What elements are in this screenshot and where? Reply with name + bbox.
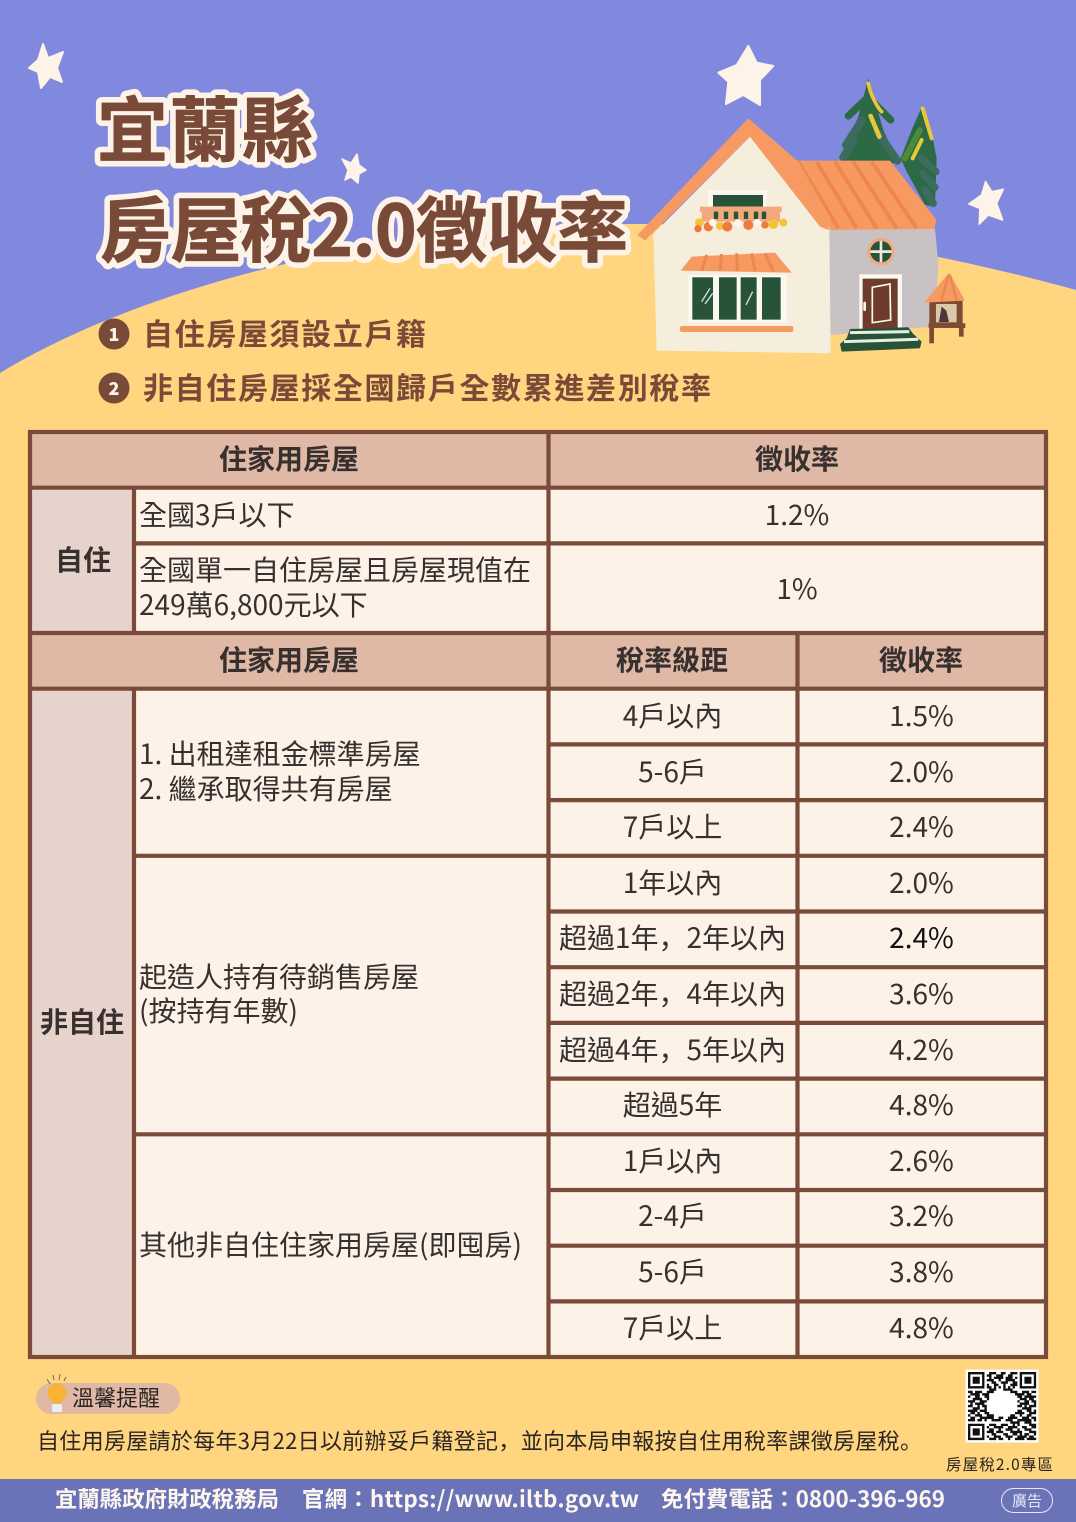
non-owner-occupied label cell — [30, 689, 134, 1357]
rates column: 3.6% — [889, 973, 954, 1013]
brackets column: 2-4戶 — [638, 1195, 707, 1235]
title line 1: 宜蘭縣 — [97, 75, 313, 177]
rates column — [889, 695, 954, 1347]
icon: light bulb — [47, 1374, 66, 1412]
star: right — [969, 182, 1003, 224]
star: small centre — [342, 154, 366, 183]
bullet 1: 自住房屋須設立戶籍 — [143, 310, 426, 354]
footer bar — [0, 1479, 1076, 1522]
rate 1.2%: 1.2% — [765, 494, 829, 534]
illustration: house, trees and stars — [637, 46, 1003, 353]
rates column: 2.0% — [889, 751, 954, 791]
row: single home — [139, 549, 531, 624]
brackets column: 7戶以上 — [623, 806, 722, 846]
cream main wall — [653, 137, 831, 353]
round window — [867, 238, 895, 265]
rates column: 4.2% — [889, 1029, 954, 1069]
grey wing wall — [828, 228, 938, 335]
brackets column: 5-6戶 — [638, 1251, 707, 1291]
brackets column: 4戶以內 — [623, 695, 722, 735]
footer: website: 官網：https://www.iltb.gov.tw — [302, 1482, 639, 1514]
header row 1 background — [30, 432, 1046, 488]
tax rate table — [30, 432, 1046, 1357]
bullet 2: 2 — [109, 375, 120, 401]
rates column: 4.8% — [889, 1084, 954, 1124]
brackets column: 超過5年 — [623, 1084, 722, 1124]
label: owner-occupied: 自住 — [55, 539, 111, 579]
rates column: 1.5% — [889, 695, 954, 735]
small hut — [924, 273, 965, 343]
reminder text: 自住用房屋請於每年3月22日以前辦妥戶籍登記，並向本局申報按自住用稅率課徵房屋稅。 — [37, 1424, 922, 1456]
brackets column — [559, 695, 786, 1347]
advertisement badge: 廣告 — [1012, 1490, 1042, 1511]
header: housing type 2: 住家用房屋 — [219, 639, 359, 679]
title line 1: 宜蘭縣 — [97, 75, 313, 177]
advertisement badge — [1002, 1488, 1052, 1512]
row: single home: 249萬6,800元以下 — [139, 584, 368, 624]
category: rental and inherited: 2. 繼承取得共有房屋 — [139, 768, 393, 808]
side roof — [797, 161, 937, 230]
brackets column: 7戶以上 — [623, 1307, 722, 1347]
brackets column: 1年以內 — [623, 862, 722, 902]
rates column: 2.0% — [889, 862, 954, 902]
rate 1%: 1% — [776, 568, 818, 608]
bullet 1: 1 — [109, 321, 119, 347]
rates column: 3.8% — [889, 1251, 954, 1291]
tree: left — [842, 78, 898, 163]
label: non-owner-occupied: 非自住 — [40, 1001, 124, 1041]
brackets column: 超過4年，5年以內 — [559, 1029, 786, 1069]
brackets column: 超過2年，4年以內 — [559, 973, 786, 1013]
header: housing type: 住家用房屋 — [219, 438, 359, 478]
rates column: 3.2% — [889, 1195, 954, 1235]
brackets column: 5-6戶 — [638, 751, 707, 791]
row: three or fewer: 全國3戶以下 — [139, 494, 295, 534]
footer: phone: 免付費電話：0800-396-969 — [661, 1482, 945, 1514]
reminder badge — [36, 1374, 180, 1414]
rates column: 2.6% — [889, 1140, 954, 1180]
rates column: 2.4% — [889, 917, 954, 957]
category: builder-held: 起造人持有待銷售房屋 — [139, 956, 419, 996]
rates column: 4.8% — [889, 1307, 954, 1347]
table grid lines — [30, 432, 1046, 1357]
header row 2 background — [30, 633, 1046, 689]
bullet 2: 非自住房屋採全國歸戶全數累進差別稅率 — [143, 364, 711, 408]
title line 2: 房屋稅2.0徵收率 — [100, 175, 628, 277]
brackets column: 超過1年，2年以內 — [559, 917, 786, 957]
header: bracket: 稅率級距 — [616, 639, 728, 679]
category: other: 其他非自住住家用房屋(即囤房) — [139, 1224, 522, 1264]
brackets column: 1戶以內 — [623, 1140, 722, 1180]
balcony — [694, 190, 787, 232]
bay window — [680, 253, 793, 332]
category: builder-held: (按持有年數) — [139, 990, 298, 1030]
star: above house — [718, 46, 773, 105]
row: single home: 全國單一自住房屋且房屋現值在 — [139, 549, 531, 589]
QR code — [966, 1370, 1038, 1442]
reminder badge: 溫馨提醒 — [72, 1381, 160, 1413]
title line 2: 房屋稅2.0徵收率 — [100, 175, 628, 277]
footer: agency: 宜蘭縣政府財政稅務局 — [55, 1482, 279, 1514]
category: rental and inherited: 1. 出租達租金標準房屋 — [139, 733, 421, 773]
star: top left — [29, 44, 63, 88]
header: rate 2: 徵收率 — [879, 639, 963, 679]
door — [859, 274, 902, 329]
header: rate: 徵收率 — [755, 438, 839, 478]
tree: right — [901, 105, 937, 207]
steps — [840, 327, 922, 352]
QR caption: 房屋稅2.0專區 — [946, 1453, 1053, 1475]
category: builder-held — [139, 956, 419, 1030]
rates column: 2.4% — [889, 806, 954, 846]
category: rental and inherited — [139, 733, 421, 808]
gable roof — [637, 118, 831, 241]
owner-occupied label cell — [30, 488, 134, 633]
